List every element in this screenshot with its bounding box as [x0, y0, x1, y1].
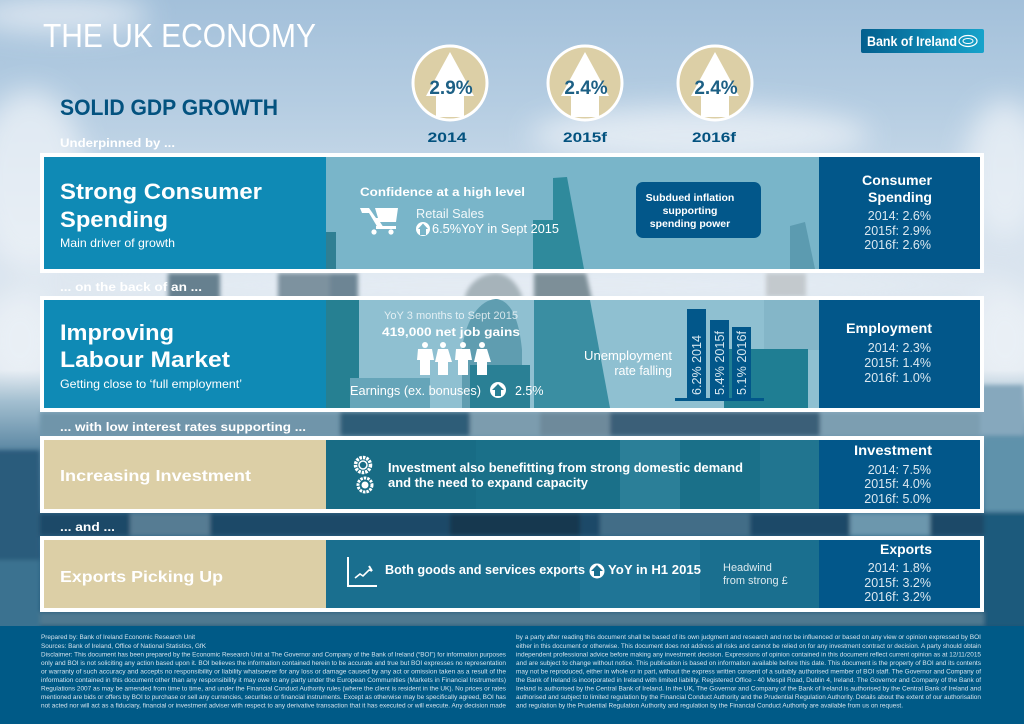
GDP badge 2014 — [413, 46, 487, 120]
disclaimer left column: only and BOI is not soliciting any action based upon it. BOI believes the information contained herein to be accurate and true but BOI expresses no representation — [41, 660, 507, 667]
bar chart: unemployment rate: 5.4% 2015f — [712, 331, 727, 395]
panel: labour market: 419,000 net job gains — [382, 325, 520, 339]
GDP badge 2016f — [678, 46, 752, 120]
heading: Labour Market — [60, 347, 231, 372]
headwind note: Headwind — [723, 562, 772, 574]
exports stats: 2014: 1.8% — [868, 561, 931, 575]
year labels: 2016f — [692, 129, 736, 145]
employment stats: 2014: 2.3% — [868, 341, 931, 355]
heading: Spending — [60, 207, 168, 232]
year labels: 2014 — [428, 129, 467, 145]
investment stats — [854, 443, 933, 506]
icon: four people — [417, 342, 491, 375]
confidence text: Confidence at a high level — [360, 185, 525, 199]
exports stats: 2015f: 3.2% — [864, 576, 931, 590]
icon: up arrow — [490, 382, 506, 398]
callout: subdued inflation: Subdued inflation — [646, 192, 734, 204]
disclaimer right column: and regulation by the Prudential Regulation Authority and regulation by the Financial Conduct Authority are available from us on request. — [516, 702, 903, 710]
heading — [60, 320, 231, 372]
employment stats: 2015f: 1.4% — [864, 356, 931, 370]
investment text — [388, 461, 743, 490]
disclaimer right column: either in this document or otherwise. This document does not address all risks and cannot be relied on for any investment contract or decision. A party should obtain — [516, 643, 982, 650]
heading: Increasing Investment — [60, 468, 252, 485]
bar chart: unemployment rate: 5.1% 2016f — [734, 331, 749, 395]
panel: labour market: 2.5% — [515, 384, 544, 398]
investment text: and the need to expand capacity — [388, 476, 588, 490]
investment stats: Investment — [854, 443, 933, 458]
callout: subdued inflation: supporting — [663, 205, 717, 217]
disclaimer right column: the Bank of Ireland is incorporated in Ireland with limited liability. Registered Office - 40 Mespil Road, Dublin 4, Ireland. The Governor and Company of the Bank of — [516, 677, 981, 684]
bar chart: unemployment rate — [675, 309, 764, 401]
consumer stats: 2014: 2.6% — [868, 209, 931, 223]
year labels — [428, 129, 736, 145]
connector: on the back of: ... on the back of an ... — [60, 280, 202, 294]
disclaimer left column: not acted nor will act as a fiduciary, financial or investment adviser with respect to any derivative transaction that it has executed or will execute. Any decision made — [41, 702, 507, 710]
exports stats: 2016f: 3.2% — [864, 590, 931, 604]
year labels: 2015f — [563, 129, 607, 145]
callout: subdued inflation — [636, 182, 761, 238]
disclaimer right column: may not be reproduced, either in whole or in part, without the express written consent of a suitably authorised member of BOI staff. The Governor and Company of — [516, 668, 981, 676]
panel: consumer spending: 6.5%YoY in Sept 2015 — [432, 222, 559, 236]
disclaimer right column: authorised and subject to limited regulation by the Financial Conduct Authority and the Prudential Regulation Authority. Details about the extent of our authorisation — [516, 694, 982, 701]
heading: Strong Consumer — [60, 179, 262, 204]
GDP badge 2015f — [548, 46, 622, 120]
heading: Improving — [60, 320, 174, 345]
disclaimer right column: Ireland is authorised by the Central Bank of Ireland. In the UK, The Governor and Company of the Bank of Ireland is authorised by the Central Bank of Ireland and — [516, 686, 982, 692]
earnings text: Earnings (ex. bonuses) — [350, 384, 481, 398]
employment stats: 2016f: 1.0% — [864, 371, 931, 385]
headwind note: from strong £ — [723, 575, 788, 587]
panel: increasing investment — [40, 436, 984, 513]
heading: solid GDP growth: SOLID GDP GROWTH — [60, 95, 278, 120]
unemployment text — [584, 349, 673, 378]
disclaimer right column — [516, 634, 982, 710]
consumer stats — [862, 173, 933, 252]
GDP badge 2014: 2.9% — [429, 78, 473, 99]
investment stats: 2014: 7.5% — [868, 463, 931, 477]
investment stats: 2016f: 5.0% — [864, 492, 931, 506]
exports stats — [864, 542, 932, 604]
investment stats: 2015f: 4.0% — [864, 477, 931, 491]
disclaimer left column: mentioned are bids or offers by BOI to purchase or sell any currencies, securities or financial instruments. Except as otherwise may be specifically agreed, BOI has — [41, 694, 506, 701]
headwind note — [723, 562, 788, 587]
subheading: Getting close to ‘full employment’ — [60, 377, 242, 391]
disclaimer left column: Prepared by: Bank of Ireland Economic Research Unit — [41, 634, 195, 641]
unemployment text: rate falling — [614, 364, 672, 378]
bar chart: unemployment rate: 6.2% 2014 — [689, 335, 704, 395]
icon: gears — [356, 458, 372, 492]
connector: low interest rates: ... with low interest rates supporting ... — [60, 420, 306, 434]
disclaimer left column: Sources: Bank of Ireland, Office of National Statistics, GfK — [41, 643, 207, 650]
disclaimer right column: and are subject to change without notice. This publication is based on information available before this date. This document is the property of BOI and its contents — [516, 660, 981, 667]
consumer stats: 2016f: 2.6% — [864, 238, 931, 252]
GDP badge 2016f: 2.4% — [694, 78, 738, 99]
unemployment text: Unemployment — [584, 349, 673, 363]
employment stats — [846, 321, 933, 385]
disclaimer left column: information contained in this document other than any responsibility it may owe to any party under the European Communities (Markets in Financial Instruments) — [41, 677, 506, 684]
icon: shopping cart — [360, 208, 398, 235]
callout: subdued inflation: spending power — [650, 218, 730, 230]
icon: growth chart — [348, 557, 377, 586]
panel: labour market — [40, 296, 984, 412]
panel: exports picking up — [40, 536, 984, 612]
panel: footer disclaimer — [0, 626, 1024, 724]
connector: and: ... and ... — [60, 520, 115, 534]
disclaimer left column — [41, 634, 507, 710]
disclaimer left column: Disclaimer: This document has been prepared by the Economic Research Unit at The Governor and Company of the Bank of Ireland (“BOI”) for information purposes — [41, 652, 506, 658]
panel: consumer spending — [40, 153, 984, 273]
icon: up arrow — [416, 222, 430, 236]
skyline buildings in the gaps — [0, 273, 1024, 630]
exports stats: Exports — [880, 542, 932, 557]
consumer stats: Spending — [868, 190, 932, 205]
subheading: Main driver of growth — [60, 236, 175, 250]
consumer stats: Consumer — [862, 173, 933, 188]
icon: up arrow — [590, 564, 604, 578]
job gains text: YoY 3 months to Sept 2015 — [384, 310, 518, 322]
employment stats: Employment — [846, 321, 933, 336]
disclaimer right column: independent professional advice before making any investment decision. Expressions of opinion contained in this document reflect current opinion as at 12/11/2015 — [516, 652, 981, 658]
panel: exports picking up: YoY in H1 2015 — [608, 563, 701, 577]
GDP badge 2015f: 2.4% — [564, 78, 608, 99]
disclaimer right column: by a party after reading this document shall be based of its own judgment and research and not be influenced or based on any view or opinion expressed by BOI — [516, 634, 981, 641]
logo: Bank of Ireland — [861, 29, 984, 53]
investment text: Investment also benefitting from strong domestic demand — [388, 461, 743, 475]
exports text: Both goods and services exports — [385, 563, 585, 577]
disclaimer left column: or warranty of such accuracy and accepts no responsibility or liability whatsoever for any loss or damage caused by any act or omission taken as a result of the — [41, 668, 507, 676]
connector: underpinned by: Underpinned by ... — [60, 136, 175, 150]
heading — [60, 179, 262, 232]
disclaimer left column: Regulations 2007 as may be amended from time to time, and under the Financial Conduct Authority rules (where the client is resident in the UK). No prices or rates — [41, 686, 506, 692]
title: THE UK ECONOMY — [43, 17, 316, 54]
heading: Exports Picking Up — [60, 569, 223, 586]
retail sales text: Retail Sales — [416, 207, 484, 221]
logo: Bank of Ireland: Bank of Ireland — [867, 33, 957, 49]
consumer stats: 2015f: 2.9% — [864, 224, 931, 238]
